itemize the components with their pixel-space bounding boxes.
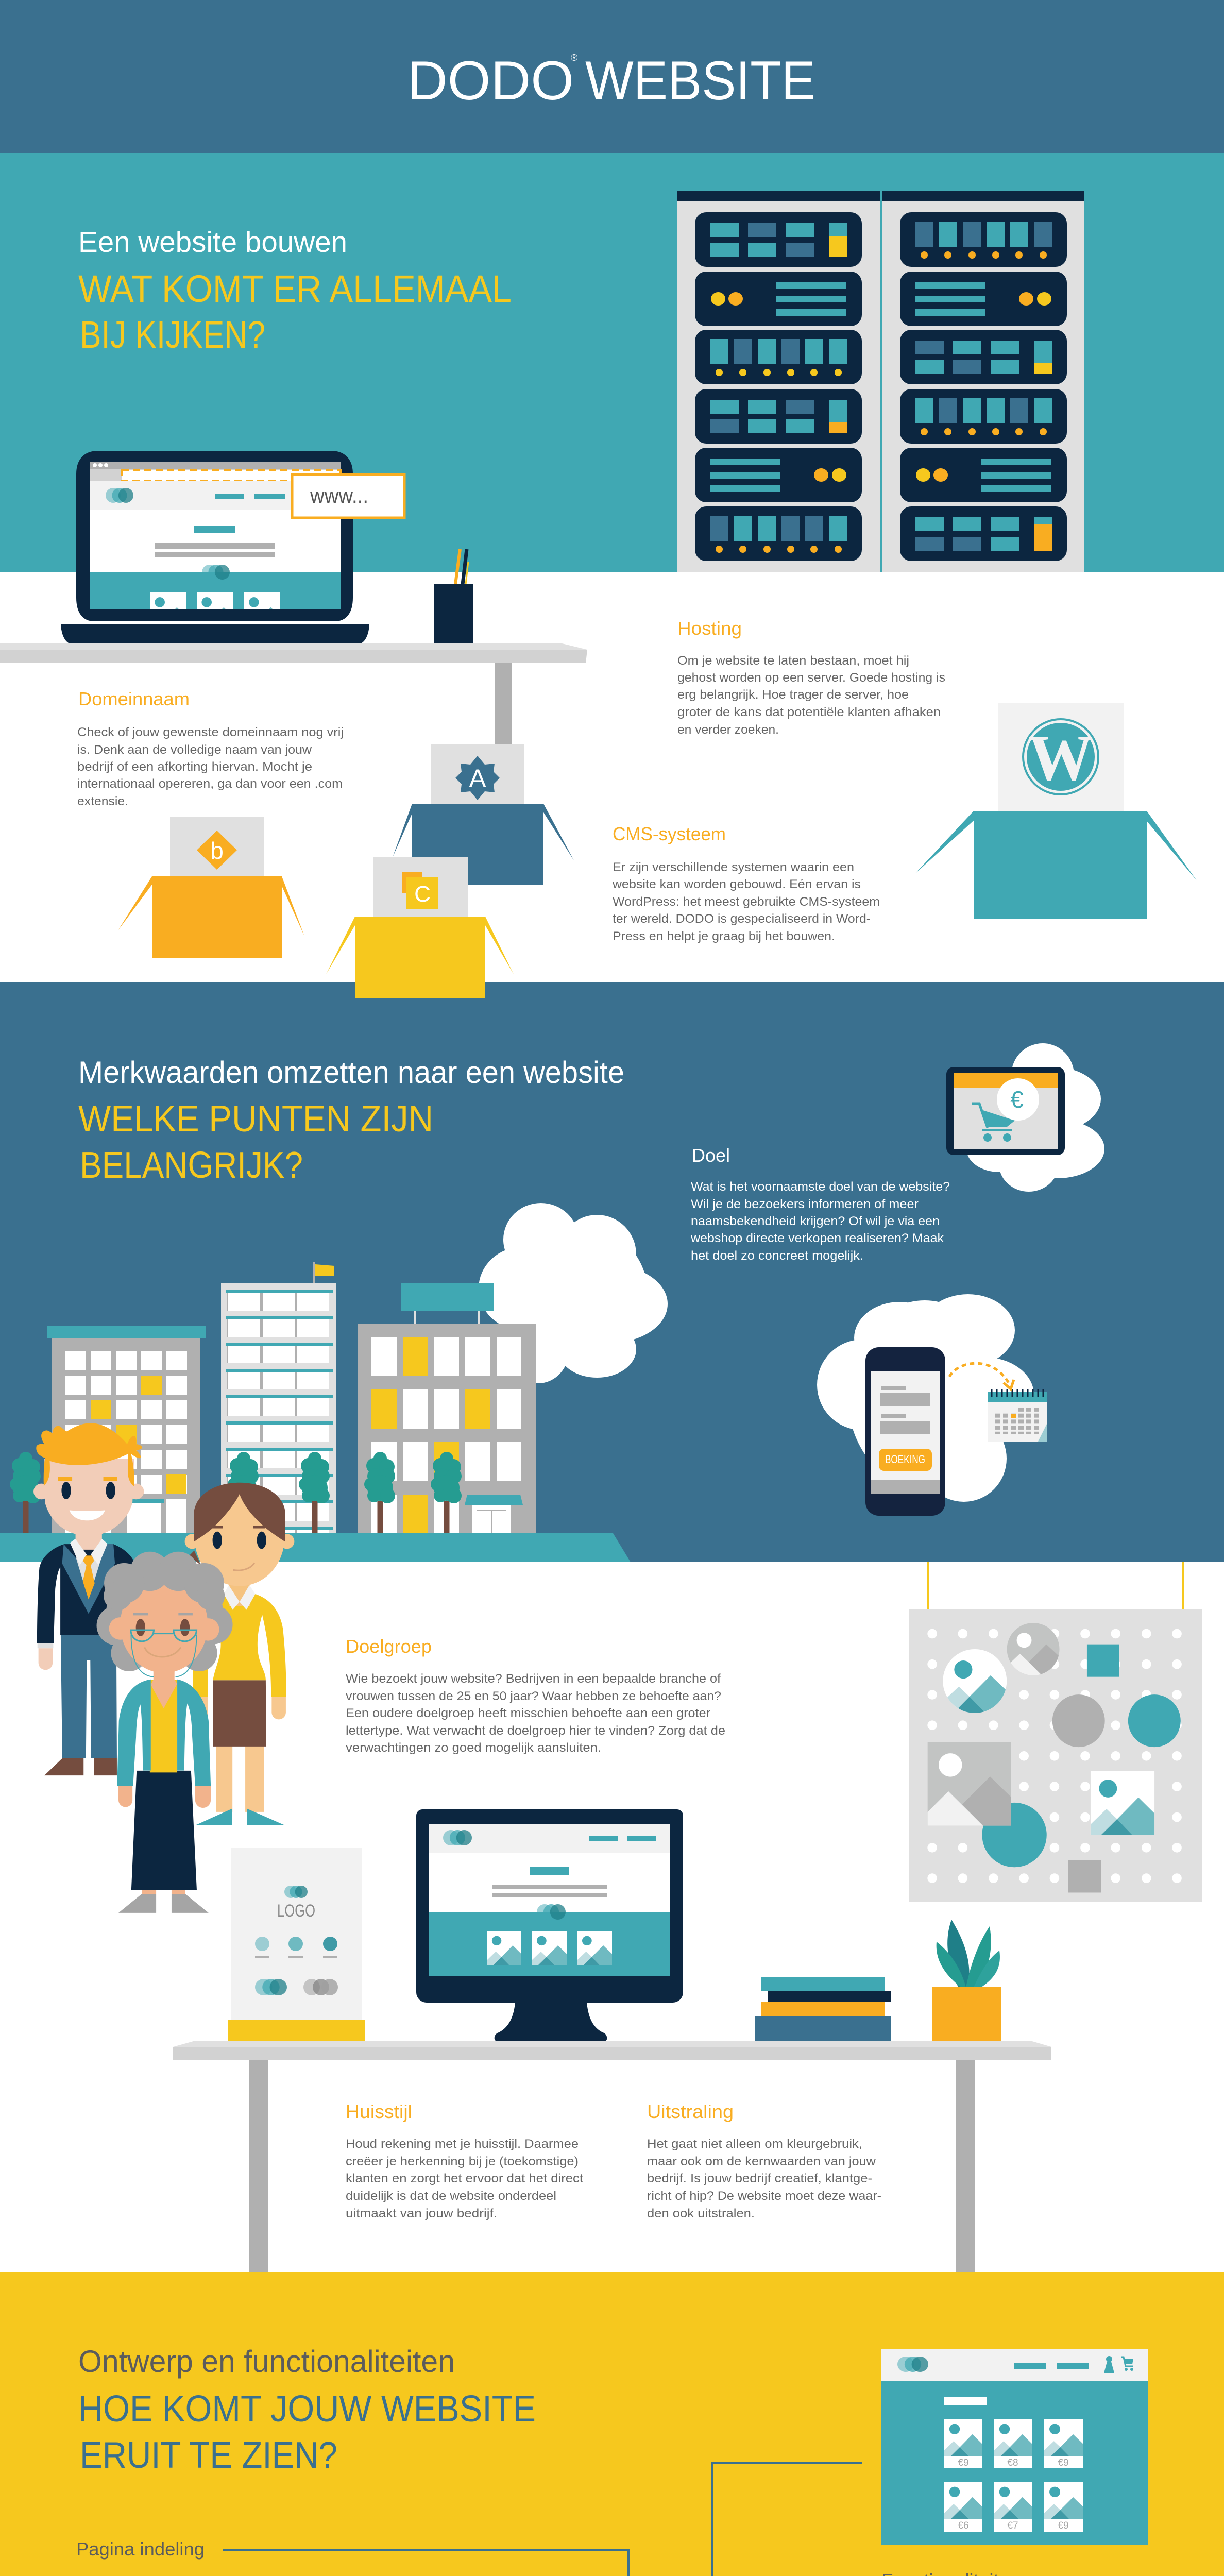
- text: hosting: Hosting: [677, 618, 742, 639]
- box with domain A card: [393, 744, 574, 885]
- heading: merkwaarden: BELANGRIJK?: [80, 1145, 303, 1186]
- text: cms-systeem: ter wereld. DODO is gespecialiseerd in Word-: [613, 912, 871, 926]
- text: uitstraling: Uitstraling: [647, 2101, 734, 2122]
- webshop window: €7: [1007, 2520, 1018, 2531]
- heading: ontwerp: HOE KOMT JOUW WEBSITE: [78, 2388, 536, 2430]
- text: pagina indeling: Pagina indeling: [76, 2538, 205, 2560]
- text: huisstijl: Houd rekening met je huisstijl. Daarmee: [346, 2137, 579, 2151]
- text: doel: het doel zo concreet mogelijk.: [691, 1249, 863, 1263]
- box with domain c card: [326, 857, 514, 998]
- character: man: [33, 1423, 144, 1775]
- cloud with webshop tablet: €: [1010, 1086, 1024, 1113]
- trees: [10, 1452, 462, 1533]
- www address callout: www...: [310, 483, 368, 507]
- connector: pagina indeling: [223, 2550, 628, 2576]
- text: uitstraling: Het gaat niet alleen om kleurgebruik,: [647, 2137, 862, 2151]
- potted plant: [932, 1920, 1001, 2041]
- box with wordpress card: [915, 703, 1197, 919]
- building: middle with flag: [221, 1262, 336, 1533]
- text: hosting: erg belangrijk. Hoe trager de server, hoe: [677, 688, 909, 702]
- text: hosting: [677, 618, 945, 737]
- text: hosting: gehost worden op een server. Goede hosting is: [677, 671, 945, 685]
- text: cms-systeem: CMS-systeem: [613, 823, 726, 844]
- text: doelgroep: lettertype. Wat verwacht de doelgroep hier te vinden? Zorg dat de: [346, 1724, 725, 1738]
- desk: [0, 643, 587, 744]
- logo title: ®: [571, 53, 577, 63]
- heading: ontwerp: Ontwerp en functionaliteiten: [78, 2344, 455, 2379]
- webshop window: €6: [958, 2520, 969, 2531]
- www address callout: [292, 474, 404, 518]
- text: hosting: en verder zoeken.: [677, 723, 779, 737]
- pen cup: [434, 549, 473, 643]
- section background: design yellow: [0, 2272, 1224, 2576]
- text: doel: Wat is het voornaamste doel van de website?: [691, 1180, 950, 1194]
- laptop: [61, 451, 369, 643]
- heading: merkwaarden: WELKE PUNTEN ZIJN: [78, 1098, 433, 1140]
- box with domain A card: A: [469, 764, 486, 793]
- box with domain c card: C: [414, 882, 431, 907]
- text: hosting: groter de kans dat potentiële klanten afhaken: [677, 705, 941, 719]
- text: doelgroep: Doelgroep: [346, 1636, 432, 1657]
- text: doelgroep: verwachtingen zo goed mogelijk aansluiten.: [346, 1741, 601, 1755]
- heading: ontwerp: ERUIT TE ZIEN?: [80, 2435, 337, 2476]
- server rack: [677, 191, 1084, 572]
- text: doelgroep: Wie bezoekt jouw website? Bedrijven in een bepaalde branche of: [346, 1672, 721, 1686]
- big cloud behind buildings: [479, 1203, 668, 1383]
- text: doel: webshop directe verkopen realiseren? Maak: [690, 1231, 944, 1245]
- character: grandmother: [97, 1552, 233, 1913]
- heading: merkwaarden: [78, 1055, 624, 1186]
- text: uitstraling: bedrijf. Is jouw bedrijf creatief, klantge-: [647, 2172, 872, 2185]
- table: [173, 2041, 1051, 2272]
- text: doelgroep: [346, 1636, 725, 1755]
- webshop window: €9: [1058, 2458, 1069, 2468]
- stack of books: [755, 1977, 891, 2041]
- webshop window: €9: [958, 2458, 969, 2468]
- logo title: WEBSITE: [585, 49, 815, 111]
- text: doelgroep: vrouwen tussen de 25 en 50 jaar? Waar hebben ze behoefte aan?: [346, 1689, 721, 1703]
- text: huisstijl: [346, 2101, 583, 2221]
- heading: ontwerp: [78, 2344, 536, 2476]
- text: domeinnaam: extensie.: [77, 794, 128, 808]
- text: huisstijl: uitmaakt van jouw bedrijf.: [346, 2207, 497, 2221]
- webshop window: €8: [1007, 2458, 1018, 2468]
- text: doel: [690, 1145, 950, 1263]
- heading: een website bouwen: Een website bouwen: [78, 226, 347, 259]
- building: left: [47, 1326, 206, 1533]
- text: huisstijl: Huisstijl: [346, 2101, 412, 2122]
- logo stand: LOGO: [277, 1901, 315, 1921]
- logo stand: [228, 1848, 365, 2041]
- text: cms-systeem: website kan worden gebouwd. Eén ervan is: [612, 877, 861, 891]
- text: pagina indeling: [76, 2538, 344, 2576]
- text: cms-systeem: [612, 823, 880, 943]
- text: domeinnaam: [77, 688, 344, 808]
- logo title: [407, 49, 815, 111]
- text: huisstijl: klanten en zorgt het ervoor dat het direct: [346, 2172, 583, 2185]
- text: cms-systeem: Er zijn verschillende systemen waarin een: [613, 860, 854, 874]
- logo title: DODO: [407, 49, 574, 111]
- text: doelgroep: Een oudere doelgroep heeft misschien behoefte aan een groter: [346, 1706, 710, 1720]
- text: uitstraling: den ook uitstralen.: [647, 2207, 755, 2221]
- heading: merkwaarden: Merkwaarden omzetten naar een website: [78, 1055, 624, 1090]
- box with domain b card: [118, 817, 304, 958]
- building: right with sign: [358, 1283, 536, 1533]
- cloud with phone and calendar: [817, 1294, 1047, 1516]
- text: doel: Wil je de bezoekers informeren of meer: [691, 1197, 919, 1211]
- section background: brand values blue: [0, 982, 1224, 1562]
- text: cms-systeem: Press en helpt je graag bij het bouwen.: [613, 929, 835, 943]
- cloud with phone and calendar: BOEKING: [885, 1453, 925, 1466]
- cloud with webshop tablet: [946, 1043, 1104, 1192]
- heading: een website bouwen: BIJ KIJKEN?: [80, 313, 265, 356]
- text: domeinnaam: internationaal opereren, ga dan voor een .com: [77, 777, 343, 791]
- section background: hosting teal: [0, 153, 1224, 572]
- hanging mood board: [909, 1562, 1202, 1902]
- webshop window: €9: [1058, 2520, 1069, 2531]
- text: domeinnaam: Check of jouw gewenste domeinnaam nog vrij: [77, 725, 344, 739]
- heading: een website bouwen: [78, 226, 512, 356]
- text: huisstijl: duidelijk is dat de website onderdeel: [346, 2189, 556, 2203]
- text: cms-systeem: WordPress: het meest gebruikte CMS-systeem: [613, 895, 880, 909]
- webshop window: [881, 2349, 1148, 2545]
- text: uitstraling: richt of hip? De website moet deze waar-: [647, 2189, 881, 2203]
- text: uitstraling: [647, 2101, 881, 2221]
- text: domeinnaam: is. Denk aan de volledige naam van jouw: [77, 743, 312, 757]
- box with domain b card: b: [210, 837, 224, 864]
- header band: [0, 0, 1224, 153]
- connector: functionaliteiten: [712, 2463, 862, 2576]
- text: doel: Doel: [692, 1145, 730, 1166]
- text: domeinnaam: bedrijf of een afkorting hiervan. Mocht je: [77, 760, 312, 774]
- box with wordpress card: W: [1028, 722, 1093, 794]
- heading: een website bouwen: WAT KOMT ER ALLEMAAL: [78, 267, 512, 310]
- ground: [0, 1533, 631, 1562]
- desktop monitor: [416, 1809, 683, 2041]
- text: hosting: Om je website te laten bestaan, moet hij: [677, 654, 909, 668]
- text: huisstijl: creëer je herkenning bij je (toekomstige): [346, 2155, 579, 2168]
- text: domeinnaam: Domeinnaam: [78, 688, 190, 709]
- text: uitstraling: maar ook om de kernwaarden van jouw: [647, 2155, 876, 2168]
- character: woman: [185, 1483, 294, 1825]
- text: doel: naamsbekendheid krijgen? Of wil je via een: [691, 1214, 940, 1228]
